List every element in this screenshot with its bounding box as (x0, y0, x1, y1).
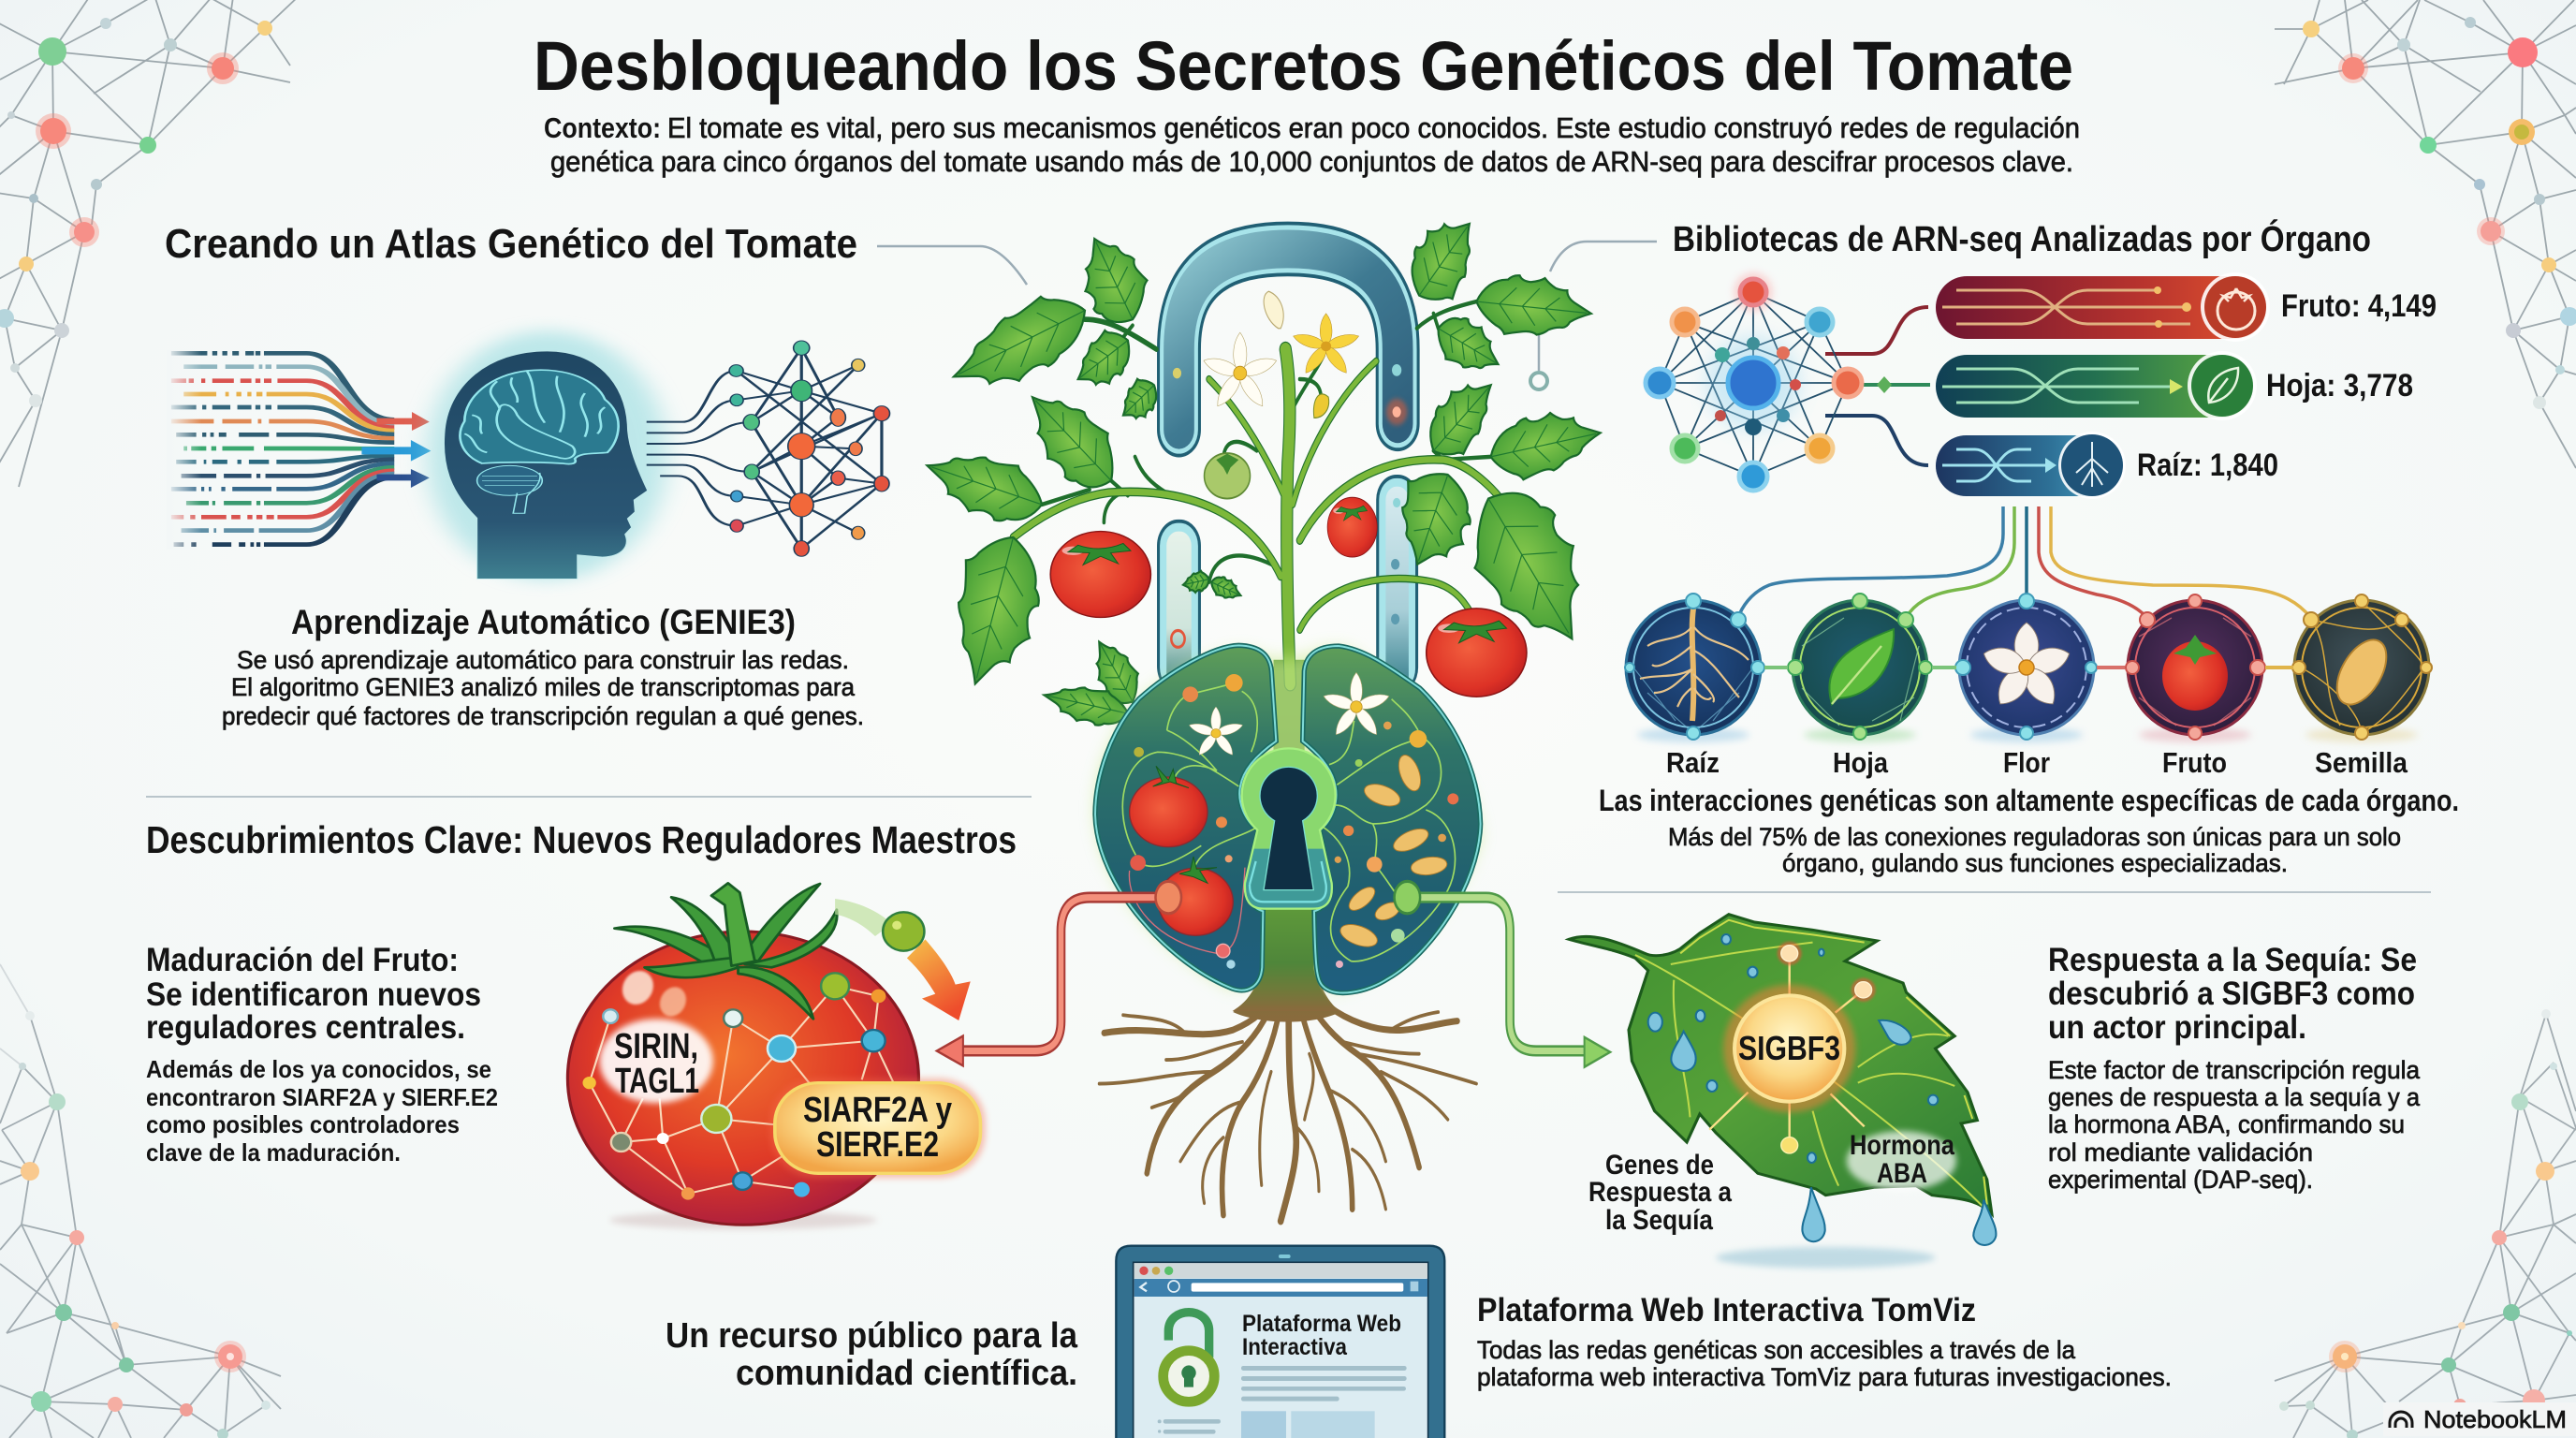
text block: respuesta a la sequía: rol mediante validación (2048, 1138, 2313, 1167)
text block: machine learning (222, 603, 864, 730)
text block: respuesta a la sequía: Este factor de transcripción regula (2048, 1056, 2421, 1084)
context text (544, 111, 2080, 178)
shackle nodes (1171, 364, 1407, 647)
output network (647, 348, 882, 549)
divider right (1558, 891, 2431, 893)
arrows from lock to fruit and leaf (937, 881, 1610, 1067)
text block: respuesta a la sequía (2048, 942, 2421, 1194)
leader line: atlas heading to plant (877, 246, 1027, 285)
labels on leaf: ABA (1877, 1158, 1927, 1189)
heading: Bibliotecas: Bibliotecas de ARN-seq Analizadas por Órgano (1673, 218, 2371, 259)
text block: organ specificity: Más del 75% de las conexiones reguladoras son únicas para un solo (1668, 823, 2401, 851)
head glow (427, 330, 667, 580)
ripening arrow (835, 899, 971, 1020)
text block: TomViz: plataforma web interactiva TomViz para futuras investigaciones. (1477, 1363, 2172, 1391)
tomato highlights (618, 967, 658, 1008)
roots (1099, 911, 1476, 1221)
divider left (146, 796, 1032, 798)
panel: machine learning illustration (166, 330, 890, 580)
labels on leaf: Respuesta a (1588, 1177, 1732, 1208)
interior tomatoes (1130, 766, 1233, 935)
text block: organ specificity: órgano, gulando sus funciones especializadas. (1782, 849, 2288, 877)
data streams (171, 353, 394, 545)
connector lines (1825, 307, 1930, 465)
laptop screen label: Plataforma Web (1242, 1311, 1401, 1337)
text block: respuesta a la sequía: experimental (DAP-seq). (2048, 1166, 2313, 1194)
leader line: bibliotecas heading to plant (1530, 242, 1657, 389)
browser bar (1134, 1263, 1427, 1278)
organ labels: Fruto (2162, 746, 2227, 779)
trunk (1233, 660, 1340, 1022)
text block: organ specificity (1599, 784, 2459, 877)
water drops (1648, 934, 1996, 1245)
labels on tomato: TAGL1 (615, 1062, 699, 1101)
leaf edge highlight (1680, 920, 1987, 1205)
lock glow (1095, 648, 1481, 992)
labels on leaf: la Sequía (1605, 1205, 1713, 1236)
organ labels: Flor (2003, 746, 2050, 779)
corner network: top right (2275, 0, 2576, 468)
illustration: big tomato (567, 883, 986, 1229)
text block: machine learning: El algoritmo GENIE3 analizó miles de transcriptomas para (231, 673, 856, 701)
leaf body (1569, 915, 1992, 1214)
labels on tomato: SIERF.E2 (816, 1125, 939, 1165)
left lobe (1095, 645, 1276, 990)
keyhole (1242, 748, 1336, 909)
calyx (614, 883, 837, 1019)
padlock shackle (1178, 249, 1398, 430)
laptop screen label (1242, 1311, 1401, 1360)
bar: Hoja: Hoja: 3,778 (2266, 368, 2413, 404)
organ chain connectors (1764, 666, 2293, 669)
open lock icon (1168, 1313, 1209, 1357)
bar: Fruto (1936, 272, 2437, 342)
shadow (1716, 1247, 1936, 1269)
organ labels (1666, 746, 2408, 779)
panel: library network (1646, 272, 1930, 491)
flowers on branches (1202, 291, 1361, 418)
labels on leaf: Hormona (1850, 1130, 1954, 1161)
text block: machine learning: Aprendizaje Automático (GENIE3) (291, 603, 796, 641)
text block: respuesta a la sequía: la hormona ABA, confirmando su (2048, 1110, 2405, 1138)
tomato body (609, 1211, 877, 1229)
organ: Hoja (1788, 594, 1932, 742)
text block: respuesta a la sequía: un actor principal. (2048, 1009, 2306, 1046)
organ: Raíz (1625, 594, 1764, 742)
title: Desbloqueando los Secretos Genéticos del Tomate (534, 27, 2073, 105)
connector lines to organs (1738, 506, 2311, 618)
labels on tomato: SIARF2A y (803, 1091, 952, 1130)
heading: Descubrimientos Clave: Descubrimientos Clave: Nuevos Reguladores Maestros (146, 818, 1017, 861)
context text: El tomate es vital, pero sus mecanismos genéticos eran poco conocidos. Este estudio construyó redes de regulación (667, 111, 2080, 144)
laptop screen label: Interactiva (1242, 1334, 1348, 1360)
text block: machine learning: predecir qué factores de transcripción regulan a qué genes. (222, 702, 864, 730)
lower shackle columns (1157, 475, 1418, 693)
hub network (1660, 292, 1848, 477)
heading: Creando un Atlas: Creando un Atlas Genético del Tomate (165, 221, 857, 267)
SIGBF3 hub (1723, 985, 1855, 1112)
text block: recurso público (666, 1316, 1078, 1393)
organ labels: Raíz (1666, 746, 1720, 779)
text block: TomViz (1477, 1292, 2172, 1391)
context text: Contexto: (544, 111, 661, 144)
illustration: drought leaf (1569, 915, 1996, 1269)
text block: recurso público: comunidad científica. (736, 1354, 1077, 1393)
brain (461, 370, 619, 513)
fade on stream ends (166, 349, 201, 550)
padlock body with inner organs (1095, 645, 1481, 1011)
arrows from streams to head (361, 412, 431, 488)
organ: Fruto (2126, 594, 2265, 742)
organ labels: Hoja (1833, 746, 1889, 779)
text block: respuesta a la sequía: Respuesta a la Sequía: Se (2048, 942, 2417, 978)
text block: maduración del fruto: clave de la maduración. (146, 1138, 401, 1167)
gene network on tomato (590, 986, 894, 1194)
tomatoes (1050, 453, 1527, 697)
NotebookLM badge (2383, 1402, 2576, 1436)
text block: maduración del fruto (146, 942, 498, 1167)
arrow to fruit (937, 881, 1181, 1065)
organ: Semilla (2292, 594, 2432, 742)
red tomato behind shackle (1327, 497, 1377, 557)
text block: maduración del fruto: Maduración del Fruto: (146, 942, 459, 978)
bar: Hoja (1936, 351, 2413, 420)
screen (1134, 1262, 1428, 1438)
bar: Fruto: Fruto: 4,149 (2281, 288, 2437, 324)
organ: Flor (1955, 594, 2097, 742)
corner network: top left (0, 0, 300, 487)
NotebookLM badge: NotebookLM (2423, 1405, 2567, 1433)
text block: respuesta a la sequía: genes de respuesta a la sequía y a (2048, 1083, 2421, 1111)
labels on leaf: Genes de (1605, 1150, 1714, 1181)
interior nodes (1130, 674, 1458, 969)
text block: maduración del fruto: encontraron SIARF2A y SIERF.E2 (146, 1083, 498, 1111)
right lobe (1303, 646, 1481, 992)
central plant: branches, leaves, fruit and roots (921, 201, 1608, 1221)
leaves (921, 201, 1608, 731)
interior network (1122, 682, 1456, 961)
context text: genética para cinco órganos del tomate usando más de 10,000 conjuntos de datos de ARN-seq para descifrar procesos clave. (550, 145, 2073, 178)
labels on leaf: SIGBF3 (1738, 1029, 1840, 1067)
rays and nodes (1709, 953, 1865, 1145)
interior flowers (1188, 672, 1391, 757)
labels on leaf (1588, 1029, 1954, 1236)
bar: Raíz: Raíz: 1,840 (2137, 448, 2278, 483)
text block: TomViz: Plataforma Web Interactiva TomViz (1477, 1292, 1976, 1328)
text block: machine learning: Se usó aprendizaje automático para construir las redas. (237, 646, 849, 674)
text block: recurso público: Un recurso público para la (666, 1316, 1078, 1356)
text block: maduración del fruto: Además de los ya conocidos, se (146, 1055, 491, 1083)
text block: maduración del fruto: como posibles controladores (146, 1110, 460, 1138)
text block: TomViz: Todas las redas genéticas son accesibles a través de la (1477, 1336, 2076, 1364)
stems (1013, 301, 1500, 720)
text block: maduración del fruto: reguladores centrales. (146, 1009, 465, 1046)
labels on tomato (614, 1027, 952, 1165)
laptop frame (1116, 1246, 1444, 1438)
labels on tomato: SIRIN, (614, 1027, 698, 1066)
head silhouette (444, 351, 648, 579)
corner network: bottom left (0, 964, 281, 1438)
corner network: bottom right (2275, 1009, 2576, 1438)
SIARF pill (769, 1078, 986, 1178)
text block: maduración del fruto: Se identificaron nuevos (146, 976, 481, 1013)
icon: notebook logo (2390, 1412, 2412, 1428)
bar: Raíz (1936, 432, 2278, 499)
seeds (1338, 752, 1448, 951)
leaf veins (1635, 943, 1987, 1211)
laptop: TomViz platform (1116, 1246, 1444, 1438)
SIRIN glow (599, 1019, 713, 1103)
re-drawn trunk between lobes (1233, 905, 1339, 1011)
text block: respuesta a la sequía: descubrió a SIGBF3 como (2048, 976, 2415, 1012)
page lines (1158, 1366, 1407, 1434)
hormona glow (1847, 1131, 1956, 1191)
arrow to leaf (1395, 881, 1610, 1067)
organ labels: Semilla (2315, 746, 2408, 779)
